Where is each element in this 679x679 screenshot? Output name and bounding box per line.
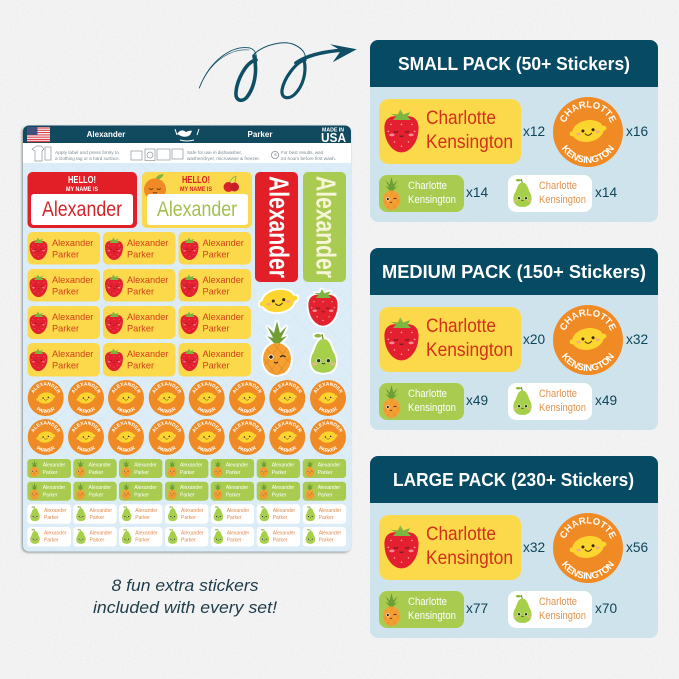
green row 2 xyxy=(27,482,346,501)
row 3: Parker xyxy=(52,324,79,334)
circle row 2: PARKER xyxy=(198,446,216,452)
white row 2: Alexander xyxy=(273,530,296,536)
circle row 1: ALEXANDER xyxy=(273,382,302,394)
row 2: Parker xyxy=(202,286,230,296)
count: x16 xyxy=(626,124,648,139)
caption: included with every set! xyxy=(93,599,277,617)
white row 1: Alexander xyxy=(135,508,158,514)
heading: hello: HELLO! xyxy=(68,174,96,186)
white sticker: Kensington xyxy=(539,194,586,206)
white sticker: Kensington xyxy=(539,610,586,622)
green row 2: Alexander xyxy=(88,485,111,491)
circle row 2: PARKER xyxy=(278,446,297,452)
round orange sticker: KENSINGTON xyxy=(562,560,614,580)
row 1 xyxy=(28,232,251,264)
count: x14 xyxy=(595,185,617,200)
row 2: Parker xyxy=(127,286,154,296)
circle row 1: ALEXANDER xyxy=(314,382,342,394)
text: apply instructions xyxy=(55,150,120,161)
white row 2: Alexander xyxy=(181,530,204,536)
row 3: Parker xyxy=(127,324,154,334)
green row 1: Alexander xyxy=(88,462,111,468)
large yellow sticker: Charlotte xyxy=(426,108,496,129)
white row 2: Alexander xyxy=(44,530,67,536)
text: safety instructions xyxy=(187,150,260,161)
icon: appliances xyxy=(131,149,183,160)
white sticker: Charlotte xyxy=(539,388,577,400)
circle row 2: PARKER xyxy=(36,446,55,452)
circle row 1: PARKER xyxy=(36,407,55,413)
circle row 1: PARKER xyxy=(158,407,176,413)
green sticker: Kensington xyxy=(408,610,456,622)
icon: strawberry extra sticker xyxy=(308,289,338,326)
count: x56 xyxy=(626,540,648,555)
large yellow sticker: Kensington xyxy=(426,340,513,361)
icon: shirt and tag xyxy=(32,146,51,161)
large yellow sticker: Kensington xyxy=(426,548,513,569)
row 3: Alexander xyxy=(127,312,168,322)
green row 1: Parker xyxy=(88,470,104,476)
green sticker: Kensington xyxy=(408,194,456,206)
round orange sticker: CHARLOTTE xyxy=(560,308,616,331)
green row 1: Alexander xyxy=(43,462,66,468)
text: apply instructions: a clothing tag or a hard surface. xyxy=(55,156,120,161)
circle row 2: PARKER xyxy=(116,446,136,452)
row 2 xyxy=(28,269,251,302)
large yellow sticker xyxy=(379,307,521,372)
text: apply instructions: Apply label and press firmly to xyxy=(55,150,120,155)
count: x77 xyxy=(466,601,488,616)
white row 2: Parker xyxy=(135,538,150,544)
panel header xyxy=(370,248,658,295)
green row 2: Parker xyxy=(318,493,333,499)
white pear labels xyxy=(27,504,346,546)
green row 1 xyxy=(27,459,346,478)
circle row 1: PARKER xyxy=(76,407,96,413)
white sticker xyxy=(508,175,592,212)
green row 1: Alexander xyxy=(272,462,295,468)
large yellow sticker: Charlotte xyxy=(426,524,496,545)
circle row 1: ALEXANDER xyxy=(112,382,140,394)
name: Alexander xyxy=(42,198,122,221)
caption: 8 fun extra stickers xyxy=(112,577,258,595)
count: x49 xyxy=(595,393,617,408)
round orange sticker: CHARLOTTE xyxy=(560,516,616,539)
white row 1: Alexander xyxy=(44,508,67,514)
row 4 xyxy=(28,343,251,376)
header name: Alexander: Alexander xyxy=(87,130,125,139)
count: x70 xyxy=(595,601,617,616)
green row 2: Parker xyxy=(180,493,195,499)
text: wash instructions: For best results, wait xyxy=(281,150,324,155)
row 2: Parker xyxy=(52,286,79,296)
white row 2: Alexander xyxy=(135,530,158,536)
row 1: Parker xyxy=(52,250,79,260)
name: Alexander xyxy=(157,198,237,221)
row 4: Parker xyxy=(202,360,230,370)
row 1: Alexander xyxy=(202,238,244,248)
heading: small pack: SMALL PACK (50+ Stickers) xyxy=(398,53,630,74)
row 2: Alexander xyxy=(127,275,168,285)
white sticker xyxy=(508,591,592,628)
yellow strawberry labels xyxy=(28,232,251,376)
green row 2: Parker xyxy=(88,493,104,499)
round orange sticker: KENSINGTON xyxy=(562,144,614,164)
count: x49 xyxy=(466,393,488,408)
made in USA mark: USA xyxy=(321,131,346,145)
circle row 1: PARKER xyxy=(198,407,216,413)
row 1: Alexander xyxy=(127,238,168,248)
green sticker xyxy=(379,383,464,420)
icon: US flag xyxy=(27,127,50,142)
row 2: Alexander xyxy=(52,275,93,285)
circle row 2: ALEXANDER xyxy=(112,421,140,432)
white row 2: Parker xyxy=(44,538,59,544)
panel header xyxy=(370,456,658,503)
white row 2: Parker xyxy=(90,538,105,544)
circle row 1: ALEXANDER xyxy=(192,382,222,394)
white row 2: Parker xyxy=(319,538,334,544)
panel header xyxy=(370,40,658,87)
icon: lemon extra sticker xyxy=(258,287,299,315)
white sticker: Charlotte xyxy=(539,180,577,192)
count: x32 xyxy=(523,540,545,555)
white sticker: Charlotte xyxy=(539,596,577,608)
green row 1: Parker xyxy=(318,470,333,476)
white row 1: Alexander xyxy=(273,508,296,514)
subheading: my name is: MY NAME IS xyxy=(180,187,212,193)
white row 1: Parker xyxy=(135,515,150,521)
large yellow sticker: Kensington xyxy=(426,132,513,153)
circle row 2: ALEXANDER xyxy=(152,421,182,432)
circle row 2: PARKER xyxy=(158,446,176,452)
count: x14 xyxy=(466,185,488,200)
green row 1: Parker xyxy=(43,470,58,476)
panel: small pack xyxy=(370,40,658,222)
swirl arrow pointing to packs xyxy=(199,43,357,100)
circle row 1: ALEXANDER xyxy=(152,382,182,394)
row 1: Alexander xyxy=(52,238,93,248)
row 3 xyxy=(28,306,251,339)
heading: medium pack: MEDIUM PACK (150+ Stickers) xyxy=(382,261,646,282)
white row 2: Parker xyxy=(273,538,288,544)
count: x32 xyxy=(626,332,648,347)
circle row 1: PARKER xyxy=(278,407,297,413)
circle row 1: ALEXANDER xyxy=(232,382,262,394)
row 4: Parker xyxy=(52,360,79,370)
white row 1: Alexander xyxy=(90,508,112,514)
green row 2: Alexander xyxy=(226,485,249,491)
green sticker: Charlotte xyxy=(408,180,447,192)
green row 1: Alexander xyxy=(180,462,203,468)
green row 2: Alexander xyxy=(272,485,295,491)
circle row 2: PARKER xyxy=(76,446,96,452)
white row 1: Alexander xyxy=(227,508,250,514)
green sticker xyxy=(379,175,464,212)
row 4: Parker xyxy=(127,360,154,370)
circle row 2: ALEXANDER xyxy=(192,421,222,432)
white row 1: Alexander xyxy=(319,508,342,514)
vertical green name sticker xyxy=(303,172,346,282)
round orange sticker xyxy=(553,305,623,375)
icon: cherries xyxy=(224,176,239,192)
count: x12 xyxy=(523,124,545,139)
green row 1: Parker xyxy=(226,470,241,476)
icon: orange xyxy=(144,174,166,200)
icon: pineapple extra sticker xyxy=(263,321,291,375)
circle row 1: ALEXANDER xyxy=(72,382,100,394)
circle row 1 xyxy=(28,380,346,416)
caption xyxy=(93,577,277,617)
white row 2: Alexander xyxy=(319,530,342,536)
white row 1: Parker xyxy=(227,515,242,521)
green pineapple labels xyxy=(27,459,346,501)
large yellow sticker: Charlotte xyxy=(426,316,496,337)
sheet base xyxy=(23,126,351,552)
vertical red name sticker xyxy=(255,172,298,282)
row 4: Alexander xyxy=(127,349,168,359)
green row 1: Parker xyxy=(134,470,149,476)
text: wash instructions xyxy=(281,150,336,161)
heading: hello: HELLO! xyxy=(182,174,210,186)
orange round labels xyxy=(28,380,346,455)
yellow name badge xyxy=(142,172,252,228)
white row 1: Parker xyxy=(319,515,334,521)
panel: large pack xyxy=(370,456,658,638)
white row 2: Alexander xyxy=(90,530,112,536)
sheet header bar xyxy=(23,126,351,145)
circle row 1: PARKER xyxy=(116,407,136,413)
circle row 2: ALEXANDER xyxy=(232,421,262,432)
round orange sticker: KENSINGTON xyxy=(562,352,614,372)
white sticker xyxy=(508,383,592,420)
row 3: Parker xyxy=(202,324,230,334)
green row 2: Alexander xyxy=(43,485,66,491)
circle row 2: PARKER xyxy=(318,446,338,452)
panel: medium pack xyxy=(370,248,658,430)
round orange sticker: CHARLOTTE xyxy=(560,100,616,123)
vertical red name sticker: Alexander xyxy=(264,176,294,278)
row 4: Alexander xyxy=(52,349,93,359)
text: wash instructions: 24 hours before first wash. xyxy=(281,156,336,161)
text: safety instructions: washer/dryer, microwave & freezer. xyxy=(187,156,260,161)
round orange sticker xyxy=(553,513,623,583)
circle row 1: PARKER xyxy=(318,407,338,413)
green row 2: Parker xyxy=(272,493,287,499)
circle row 2: ALEXANDER xyxy=(31,421,60,432)
green sticker: Charlotte xyxy=(408,596,447,608)
green row 1: Parker xyxy=(180,470,195,476)
white row 1: Parker xyxy=(181,515,196,521)
icon: logo xyxy=(175,129,199,141)
green row 2: Parker xyxy=(43,493,58,499)
row 4: Alexander xyxy=(202,349,244,359)
green row 2: Parker xyxy=(134,493,149,499)
circle row 2 xyxy=(28,419,346,455)
green row 1: Alexander xyxy=(318,462,341,468)
white row 2: Parker xyxy=(181,538,196,544)
large yellow sticker xyxy=(379,515,521,580)
instruction strip xyxy=(23,143,351,163)
round orange sticker xyxy=(553,97,623,167)
icon: pear extra sticker xyxy=(311,334,336,373)
green sticker: Charlotte xyxy=(408,388,447,400)
subheading: my name is: MY NAME IS xyxy=(66,187,98,193)
green row 1: Alexander xyxy=(226,462,249,468)
row 1: Parker xyxy=(127,250,154,260)
row 3: Alexander xyxy=(202,312,244,322)
green row 2: Parker xyxy=(226,493,241,499)
text: safety instructions: Safe for use in dishwasher, xyxy=(187,150,242,155)
row 2: Alexander xyxy=(202,275,244,285)
circle row 1: ALEXANDER xyxy=(31,382,60,394)
white row 1: Alexander xyxy=(181,508,204,514)
green row 1: Parker xyxy=(272,470,287,476)
red name badge xyxy=(28,172,137,228)
circle row 2: ALEXANDER xyxy=(273,421,302,432)
count: x20 xyxy=(523,332,545,347)
green row 1: Alexander xyxy=(134,462,157,468)
vertical green name sticker: Alexander xyxy=(310,176,342,278)
circle row 1: PARKER xyxy=(238,407,256,413)
white row 1: Parker xyxy=(90,515,105,521)
green sticker xyxy=(379,591,464,628)
green row 2: Alexander xyxy=(134,485,157,491)
white sticker: Kensington xyxy=(539,402,586,414)
row 1: Parker xyxy=(202,250,230,260)
white row 2: Parker xyxy=(227,538,242,544)
circle row 2: ALEXANDER xyxy=(314,421,342,432)
heading: large pack: LARGE PACK (230+ Stickers) xyxy=(393,469,634,490)
made in USA mark: MADE IN xyxy=(322,128,344,134)
row 3: Alexander xyxy=(52,312,93,322)
white row 2 xyxy=(27,527,346,546)
large yellow sticker xyxy=(379,99,521,164)
green row 2: Alexander xyxy=(180,485,203,491)
white row 1 xyxy=(27,504,346,524)
header name: Parker: Parker xyxy=(248,130,272,139)
green sticker: Kensington xyxy=(408,402,456,414)
white row 2: Alexander xyxy=(227,530,250,536)
white row 1: Parker xyxy=(44,515,59,521)
circle row 2: PARKER xyxy=(238,446,256,452)
circle row 2: ALEXANDER xyxy=(72,421,100,432)
sticker sheet xyxy=(20,124,352,554)
white row 1: Parker xyxy=(273,515,288,521)
green row 2: Alexander xyxy=(318,485,341,491)
icon: clock xyxy=(271,151,279,159)
